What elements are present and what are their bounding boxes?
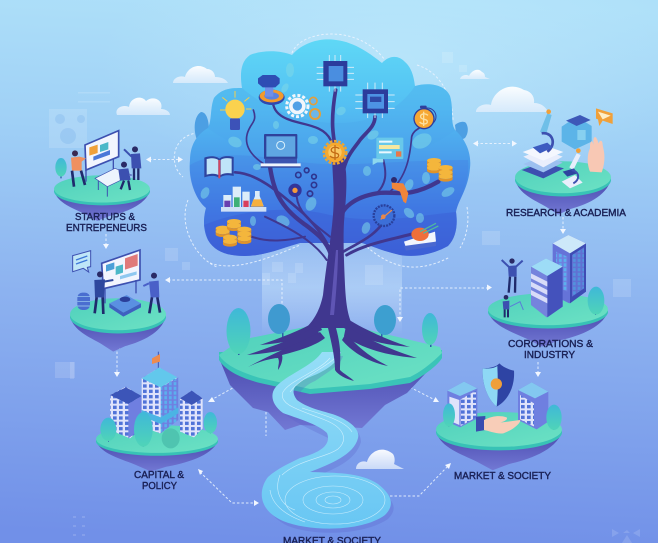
label: market and society right: MARKET & SOCIETY bbox=[454, 470, 551, 482]
right building bbox=[180, 391, 203, 437]
icon: info card bbox=[373, 138, 403, 165]
label: industry: INDUSTRY bbox=[524, 349, 575, 361]
icon: coin stacks left bbox=[216, 219, 251, 247]
presenter bbox=[71, 150, 86, 187]
icon: purple gears bbox=[288, 168, 317, 197]
tree canopy bbox=[190, 39, 470, 256]
icon: gears bbox=[287, 95, 320, 119]
icon: laptop bbox=[261, 134, 301, 168]
icon: pressure hub bbox=[258, 75, 285, 105]
tree branches and icons bbox=[204, 55, 453, 260]
trees bbox=[443, 403, 562, 430]
icon: chip one bbox=[317, 55, 354, 92]
chat bubble bbox=[73, 251, 91, 272]
right building bbox=[518, 382, 548, 429]
standing person bbox=[124, 146, 141, 180]
arrow: left island to capital bbox=[114, 344, 120, 377]
label: research and academia: RESEARCH & ACADEMIA bbox=[506, 207, 626, 219]
arrow: central island to market bbox=[390, 377, 439, 402]
clouds bbox=[116, 66, 548, 469]
trees and shrubs bbox=[100, 412, 217, 448]
arrow: river to market bbox=[390, 463, 451, 496]
device bbox=[109, 295, 141, 317]
light beam behind trunk bbox=[262, 240, 402, 335]
person with tool bbox=[503, 295, 523, 317]
tall tower bbox=[553, 235, 586, 303]
island: lower left bbox=[70, 250, 166, 352]
island: research and academia bbox=[515, 108, 613, 215]
raised hand bbox=[588, 137, 604, 172]
island: corporations and industry bbox=[488, 235, 608, 347]
canopy halo dashes bbox=[174, 34, 468, 267]
seated person bbox=[118, 162, 131, 190]
icon: book stack bbox=[404, 223, 438, 251]
branches bbox=[235, 90, 438, 260]
printer device bbox=[562, 115, 592, 149]
icon: dollar medallion bbox=[413, 106, 436, 129]
figure: climbing person bbox=[391, 177, 408, 203]
mail icon bbox=[596, 108, 613, 126]
open hand bbox=[476, 416, 520, 434]
arrow: capital to river bbox=[198, 469, 259, 506]
dashed connectors bbox=[103, 34, 566, 506]
arrow: central island to left island bbox=[165, 277, 285, 323]
tree trunk and roots bbox=[247, 150, 417, 381]
whiteboard bbox=[102, 250, 140, 303]
arrow: central island to corporations bbox=[397, 284, 492, 322]
icon: coin stacks right bbox=[427, 158, 453, 182]
central floating island bbox=[219, 304, 442, 430]
left building bbox=[447, 382, 477, 427]
icon: open book bbox=[204, 156, 234, 178]
root strands bbox=[260, 320, 322, 345]
arrow: canopy to research bbox=[473, 140, 517, 146]
person right bbox=[143, 273, 160, 313]
icon: light bulb bbox=[220, 91, 251, 130]
person left bbox=[94, 271, 113, 314]
icon: chip two bbox=[355, 83, 395, 118]
person arms raised bbox=[502, 258, 523, 293]
label: startups and entrepreneurs: STARTUPS & bbox=[75, 211, 135, 223]
table bbox=[95, 168, 132, 197]
icon: dollar gear bbox=[324, 141, 346, 164]
book stack bbox=[522, 145, 564, 178]
small microscope bbox=[562, 148, 583, 188]
arrow: research to corporations bbox=[560, 217, 566, 234]
arrow: startups to lower left island bbox=[103, 234, 109, 249]
arrow: corporations to market bbox=[535, 362, 541, 377]
island: market and society bbox=[436, 363, 562, 470]
river highlights bbox=[270, 358, 385, 524]
trees on island bbox=[226, 304, 438, 355]
label: policy: POLICY bbox=[142, 480, 177, 492]
island: capital and policy bbox=[96, 352, 218, 472]
shield bbox=[483, 363, 514, 407]
label: corporations: CORORATIONS & bbox=[508, 338, 593, 350]
icon: lab flasks bbox=[221, 187, 266, 212]
icon: gauge bbox=[374, 205, 394, 226]
presentation board bbox=[85, 131, 119, 182]
label: capital: CAPITAL & bbox=[134, 469, 184, 481]
short building bbox=[531, 258, 563, 317]
label: entrepreneurs line: ENTREPENEURS bbox=[66, 222, 147, 234]
tree bbox=[55, 158, 67, 178]
arrow: central island to capital bbox=[208, 373, 260, 402]
trunk highlight bbox=[330, 250, 338, 315]
disk stack bbox=[77, 293, 90, 310]
island: startups and entrepreneurs bbox=[54, 131, 150, 221]
tree bbox=[588, 287, 604, 315]
left building bbox=[110, 387, 142, 438]
leaves bbox=[199, 63, 456, 235]
arrow: startups to canopy bbox=[146, 156, 183, 162]
arrow: rock vertical bbox=[263, 381, 269, 436]
large microscope bbox=[533, 109, 553, 153]
river bbox=[262, 352, 394, 533]
central tower with flag bbox=[142, 352, 178, 433]
